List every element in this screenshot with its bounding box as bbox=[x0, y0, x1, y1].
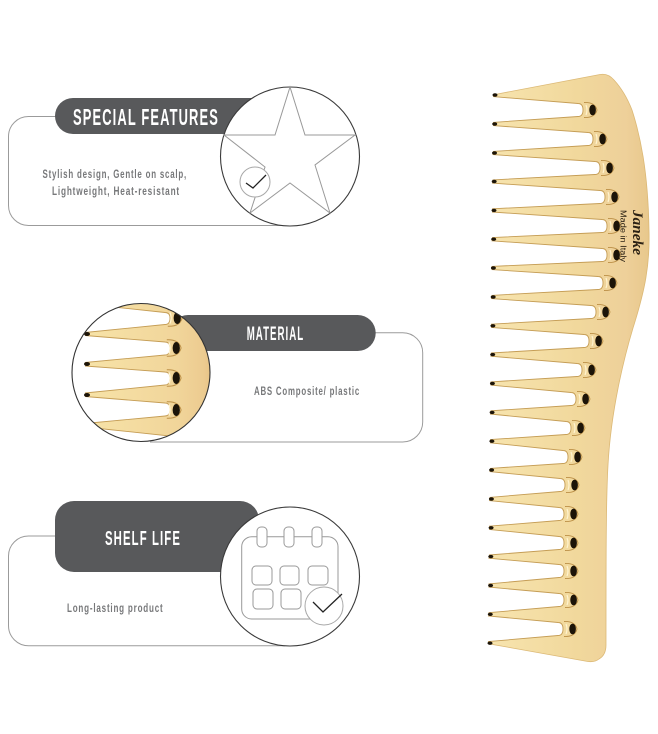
heading: shelf life: SHELF LIFE bbox=[105, 527, 181, 550]
text: shelf life description: Long-lasting product bbox=[67, 601, 164, 615]
heading: special features: SPECIAL FEATURES bbox=[73, 104, 219, 130]
icon: comb close-up in circle bbox=[72, 300, 217, 447]
outline box: special features bbox=[8, 116, 285, 226]
comb tooth tips bbox=[488, 93, 498, 645]
text: special features description bbox=[42, 167, 187, 198]
comb tooth gaps bbox=[488, 97, 607, 642]
panel: shelf life bbox=[8, 501, 360, 646]
heading: material: MATERIAL bbox=[247, 324, 304, 345]
heading pill: material bbox=[170, 315, 376, 351]
comb brand mark: Janeke bbox=[629, 209, 645, 255]
icon: calendar with check in circle bbox=[220, 507, 360, 646]
text: special features description: Stylish design, Gentle on scalp, bbox=[42, 167, 187, 181]
comb product image bbox=[488, 74, 649, 662]
comb origin text: Made in Italy bbox=[618, 210, 628, 263]
outline box: material bbox=[150, 333, 423, 442]
text: material description: ABS Composite/ plastic bbox=[254, 384, 360, 398]
outline box: shelf life bbox=[8, 536, 285, 646]
text: special features description: Lightweight, Heat-resistant bbox=[52, 184, 180, 198]
panel: material bbox=[72, 300, 423, 447]
comb gap ends bbox=[564, 102, 621, 637]
comb body bbox=[490, 74, 649, 662]
panel: special features bbox=[8, 87, 360, 226]
heading pill: shelf life bbox=[55, 501, 259, 572]
heading pill: special features bbox=[55, 98, 275, 134]
icon: star with check in circle bbox=[220, 87, 360, 226]
